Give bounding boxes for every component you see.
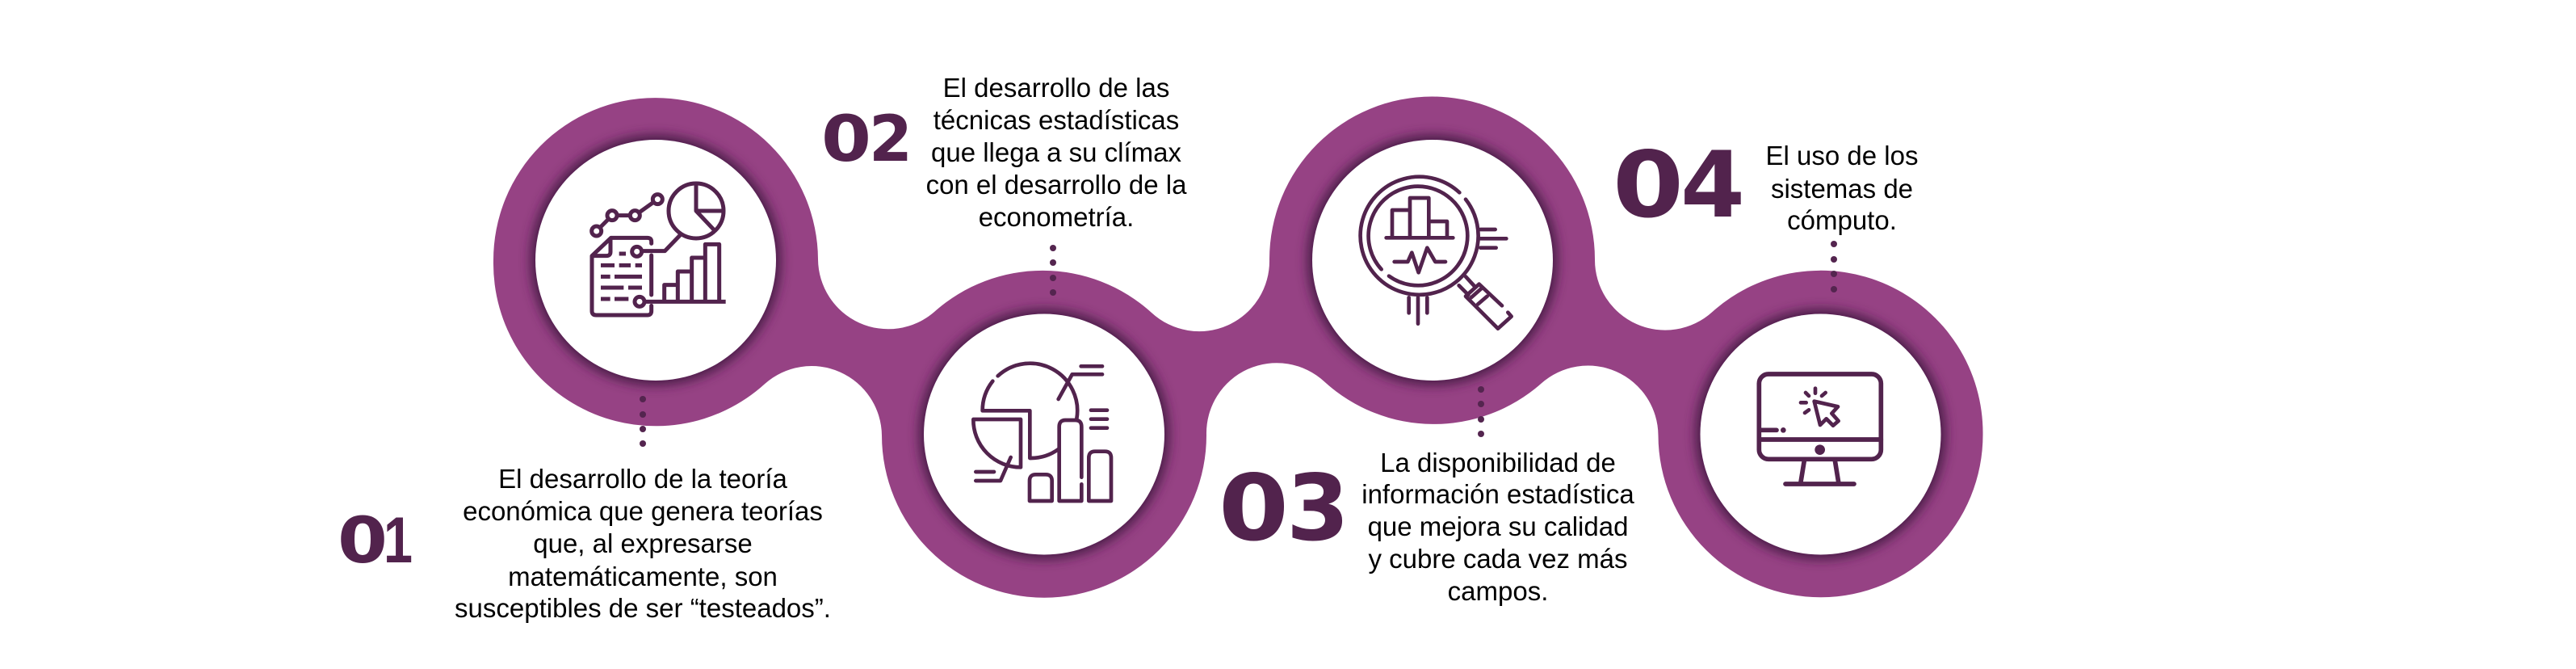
text 02: El desarrollo de las (943, 73, 1169, 103)
icon: pie chart and bars (973, 364, 1111, 501)
white disc 01 (535, 140, 776, 381)
white disc 02 (924, 313, 1164, 554)
number 04: 0 (1613, 132, 1684, 238)
text 03: y cubre cada vez más (1369, 544, 1627, 574)
text 03: La disponibilidad de (1380, 448, 1616, 478)
text 02: técnicas estadísticas (933, 105, 1179, 135)
number 01 (338, 504, 413, 578)
inner shadow ring 01 (531, 135, 781, 385)
text 02: que llega a su clímax (931, 137, 1181, 167)
connector dots 03 (1478, 386, 1484, 437)
text 01: económica que genera teorías (463, 496, 823, 526)
white disc 03 (1312, 140, 1553, 381)
text 01: que, al expresarse (533, 528, 753, 558)
purple ribbon of four linked circles (493, 97, 1983, 598)
text 03: que mejora su calidad (1368, 511, 1628, 541)
number 02: 0 (821, 103, 871, 176)
number 04: 4 (1680, 132, 1745, 238)
text 04: cómputo. (1787, 205, 1897, 235)
step 03 (1219, 135, 1634, 606)
number 03: 0 (1219, 455, 1289, 562)
text 02: econometría. (979, 202, 1134, 232)
inner shadow ring 04 (1696, 309, 1946, 559)
connector dots 04 (1831, 241, 1837, 292)
number 01: 0 (338, 505, 388, 578)
text 03: campos. (1448, 576, 1548, 606)
text 01: El desarrollo de la teoría (498, 464, 787, 494)
text 03: información estadística (1361, 479, 1634, 509)
step 01 (338, 135, 831, 623)
text 01: matemáticamente, son (508, 562, 778, 591)
number 03 (1219, 455, 1349, 562)
icon: computer monitor with cursor (1759, 374, 1881, 484)
number 02: 2 (869, 103, 913, 176)
white disc 04 (1701, 313, 1941, 554)
connector dots 02 (1050, 245, 1056, 296)
number 03: 3 (1286, 455, 1349, 562)
inner shadow ring 02 (919, 309, 1169, 559)
icon: report, line chart, pie and bars (592, 183, 726, 315)
number 04 (1613, 132, 1745, 238)
number 02 (821, 103, 913, 176)
connector dots 01 (640, 396, 646, 447)
text 04: sistemas de (1771, 174, 1913, 204)
step 04 (1613, 132, 1946, 559)
inner shadow ring 03 (1307, 135, 1558, 385)
step 02 (821, 73, 1187, 559)
icon: magnifying glass over charts (1361, 177, 1512, 329)
text 04: El uso de los (1766, 141, 1918, 170)
text 01: susceptibles de ser “testeados”. (455, 593, 831, 623)
text 02: con el desarrollo de la (926, 170, 1187, 200)
number 01: 1 (384, 504, 413, 577)
